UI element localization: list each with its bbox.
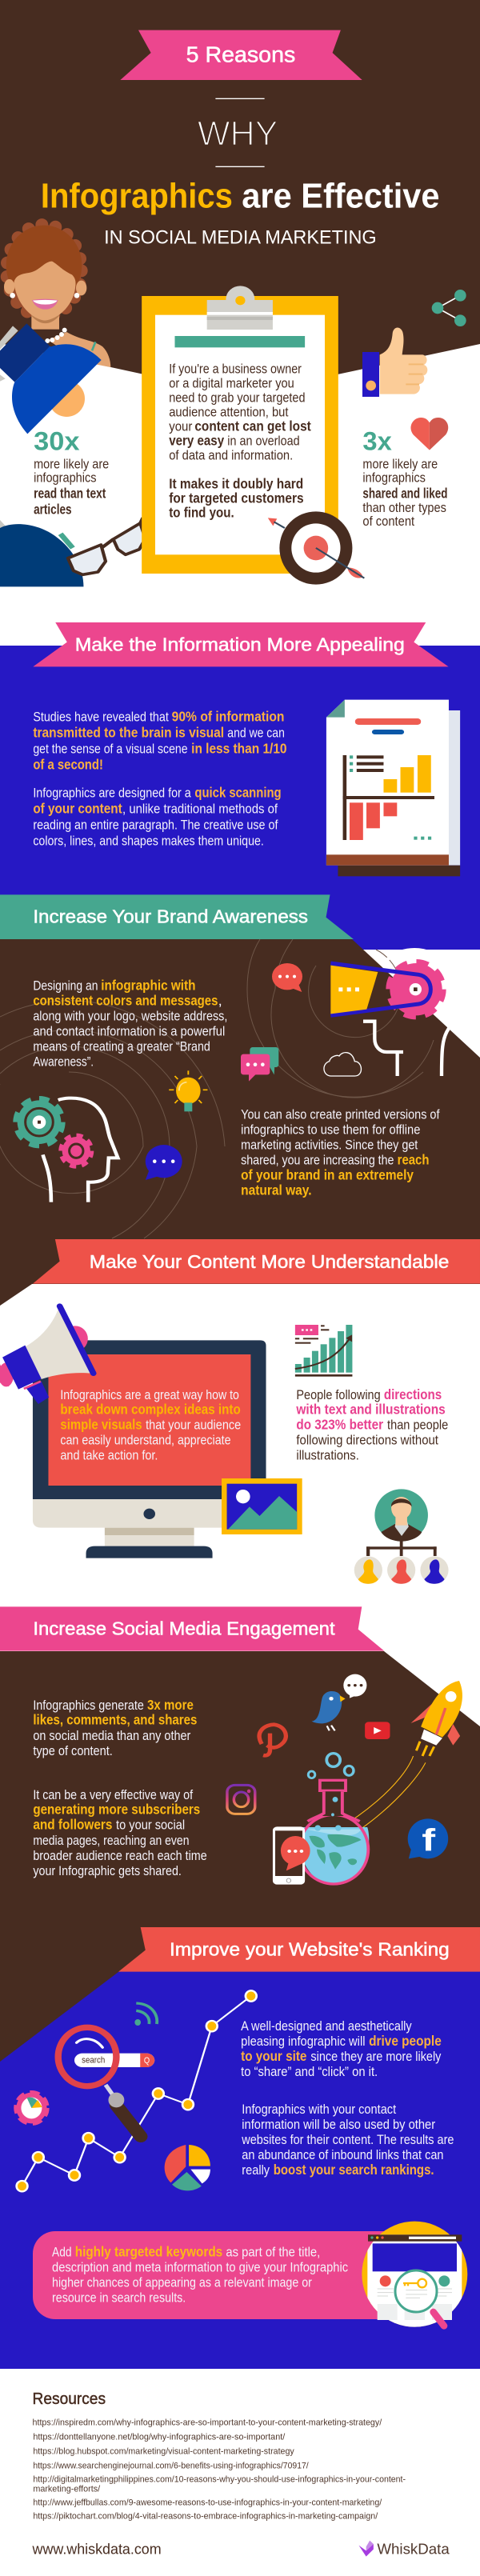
- icon: instagram: [227, 1785, 255, 1814]
- clipboard text: of data and information.: [169, 448, 293, 462]
- text block: quick scanning: [194, 785, 282, 801]
- icon: light bulb: [169, 1070, 207, 1111]
- source links: marketing-efforts/: [33, 2483, 101, 2494]
- source links: https://donttellanyone.net/blog/why-infographics-are-so-important/: [33, 2431, 286, 2442]
- ribbon heading: Make Your Content More Understandable: [90, 1252, 449, 1273]
- text block: likes, comments, and shares: [33, 1712, 197, 1728]
- ribbon heading: [0, 894, 354, 939]
- text block: designing: along with your logo, website address,: [33, 1009, 227, 1023]
- text: screen: break down complex ideas into: [60, 1402, 241, 1418]
- heading: WHY: WHY: [198, 114, 278, 153]
- panel: intro header: [0, 30, 466, 586]
- text: directions statistic: directions: [384, 1386, 442, 1403]
- text: directions statistic: following directions without: [296, 1433, 438, 1447]
- callout text: description and meta information to give your Infographic: [52, 2260, 348, 2274]
- text block: generating more subscribers: [33, 1802, 200, 1818]
- text block: Infographics are designed for a: [33, 786, 191, 800]
- text block: drive people: [369, 2033, 442, 2050]
- text: screen: Infographics are a great way how to: [60, 1387, 239, 1402]
- callout: keywords: [33, 2222, 467, 2330]
- panel: improve your website's ranking: [16, 1927, 480, 2191]
- callout text: Add: [52, 2245, 72, 2259]
- concentric rings: [0, 939, 434, 1238]
- illustration: woman with folder: [0, 225, 110, 434]
- icon: share: [432, 290, 466, 326]
- stat: 30x: [34, 427, 109, 518]
- text block: Infographics generate: [33, 1698, 144, 1713]
- text block: pleasing infographic will: [241, 2034, 366, 2049]
- icon: target and arrow: [268, 511, 364, 585]
- source links: https://piktochart.com/blog/4-vital-reasons-to-embrace-infographics-in-marketing-campaign/: [33, 2510, 378, 2521]
- source links: https://inspiredm.com/why-infographics-are-so-important-to-your-content-marketing-strategy/: [33, 2417, 382, 2427]
- text block: to your social: [116, 1818, 185, 1832]
- text: screen: [60, 1387, 241, 1462]
- text block: printed versions: [241, 1107, 440, 1198]
- text block: and we can: [227, 726, 285, 740]
- clipboard text: to find you.: [169, 505, 234, 521]
- heading: resources: Resources: [33, 2390, 106, 2408]
- text block: broader audience reach each time: [33, 1848, 207, 1863]
- ribbon: 5 Reasons: 5 Reasons: [186, 43, 295, 67]
- icon: org chart people: [354, 1489, 449, 1584]
- icon: megaphone: [0, 1306, 94, 1404]
- text block: designing: infographic with: [101, 978, 196, 994]
- ribbon heading: [33, 622, 449, 666]
- icon: youtube: [365, 1722, 390, 1739]
- text block: designing: and contact information is a powerful: [33, 1024, 225, 1038]
- illustration: bag and glasses: [0, 518, 146, 586]
- clipboard text: audience attention, but: [169, 405, 288, 419]
- ribbon heading: Make the Information More Appealing: [75, 635, 405, 655]
- icon: rocket with trails: [308, 1681, 462, 1856]
- icon: facebook bubble: [408, 1818, 448, 1858]
- callout background: [33, 2231, 409, 2319]
- text: screen: simple visuals: [60, 1417, 142, 1433]
- icon: magnifier and search bar: search: [82, 2056, 105, 2065]
- ribbon heading: Increase Your Brand Awareness: [33, 907, 308, 927]
- icon: gear with pie: [16, 2093, 47, 2123]
- clipboard text: [169, 362, 311, 521]
- stat: 30x: 30x: [34, 427, 80, 456]
- stat: 3x: infographics: [362, 470, 426, 485]
- text block: 3x more: [147, 1697, 194, 1714]
- icon: thumbs up: [362, 328, 427, 397]
- text block: [33, 709, 287, 848]
- text block: printed versions: infographics to use them for offline: [241, 1122, 420, 1137]
- panel: increase your brand awareness: [0, 894, 458, 1238]
- text: directions statistic: than people: [387, 1418, 448, 1432]
- text block: Infographics with your contact: [242, 2102, 396, 2117]
- title: Infographics: [41, 176, 233, 215]
- text block: on social media than any other: [33, 1728, 190, 1743]
- callout text: highly targeted keywords: [75, 2244, 222, 2260]
- text: directions statistic: do 323% better: [296, 1417, 383, 1433]
- text block: , unlike traditional methods of: [122, 802, 278, 816]
- text: directions statistic: [296, 1386, 448, 1462]
- clipboard panel: [142, 286, 338, 574]
- stat: 30x: read than text: [34, 486, 106, 502]
- text: directions statistic: illustrations.: [296, 1448, 359, 1462]
- text: directions statistic: People following: [296, 1387, 381, 1402]
- clipboard text: It makes it doubly hard: [169, 476, 303, 492]
- text: screen: that your audience: [146, 1418, 241, 1432]
- ribbon heading: [33, 1239, 480, 1284]
- text block: colors, lines, and shapes makes them unique.: [33, 834, 264, 848]
- text block: type of content.: [33, 1743, 113, 1758]
- text block: designing: Designing an: [33, 978, 98, 993]
- ribbon heading: [0, 1606, 384, 1651]
- clipboard text: If you're a business owner: [169, 362, 302, 376]
- panel: make the information more appealing: [33, 622, 460, 876]
- source links: https://blog.hubspot.com/marketing/visual-content-marketing-strategy: [33, 2446, 295, 2456]
- icon: report document with charts: [326, 700, 460, 876]
- illustration: monitor: [33, 1340, 266, 1558]
- title: IN SOCIAL MEDIA MARKETING: [104, 226, 377, 248]
- icon: heart: [410, 418, 448, 450]
- text block: printed versions: of your brand in an extremely: [241, 1167, 414, 1183]
- clipboard text: in an overload: [227, 434, 300, 448]
- text block: A well-designed and aesthetically: [241, 2018, 412, 2034]
- text block: designing: Awareness”.: [33, 1054, 94, 1069]
- ribbon heading: [118, 1927, 480, 1972]
- callout text: as part of the title,: [226, 2245, 320, 2259]
- icon: magnifier and search bar: [58, 2027, 154, 2137]
- stat: 30x: articles: [34, 502, 72, 518]
- source links: http://digitalmarketingphilippines.com/10-reasons-why-you-should-use-infographics-in-your-content-: [33, 2474, 406, 2484]
- source links: https://www.searchenginejournal.com/6-benefits-using-infographics/70917/: [33, 2460, 309, 2470]
- text block: designing: means of creating a greater “Brand: [33, 1039, 210, 1054]
- icon: red speech bubble: [272, 963, 302, 992]
- illustration: head with gears: [16, 1098, 118, 1202]
- icon: cloud: [324, 1053, 361, 1076]
- text block: printed versions: marketing activities. Since they get: [241, 1138, 418, 1152]
- text block: in less than 1/10: [191, 741, 287, 757]
- text block: designing: ,: [218, 993, 222, 1008]
- clipboard text: or a digital marketer you: [169, 376, 294, 390]
- stat: 3x: 3x: [362, 427, 392, 456]
- text block: really: [242, 2162, 270, 2178]
- icon: picture frame: [222, 1478, 302, 1534]
- stat: 30x: infographics: [34, 470, 97, 485]
- text block: 90% of information: [172, 709, 284, 725]
- text block: of your content: [33, 801, 122, 817]
- text block: and followers: [33, 1817, 112, 1833]
- text block: Studies have revealed that: [33, 710, 169, 724]
- callout text: [52, 2244, 348, 2305]
- text block: designing: [33, 978, 227, 1069]
- line chart: [17, 1990, 257, 2191]
- text block: your Infographic gets shared.: [33, 1863, 182, 1878]
- ribbon: 5 Reasons: [120, 30, 362, 80]
- text block: [241, 2018, 454, 2178]
- icon: phone with bubble: [273, 1826, 310, 1885]
- title: [41, 176, 439, 248]
- panel: make your content more understandable: [0, 1239, 480, 1584]
- stat: 30x: more likely are: [34, 456, 109, 471]
- text block: designing: consistent colors and messages: [33, 993, 218, 1009]
- icon: growth chart: [295, 1325, 352, 1377]
- stat: 3x: than other types: [362, 500, 446, 515]
- ribbon heading: Increase Social Media Engagement: [33, 1619, 335, 1639]
- callout text: higher chances of appearing as a relevant image or: [52, 2275, 312, 2290]
- panel: resources and footer: [32, 2390, 450, 2558]
- logo: WhiskData: [358, 2541, 450, 2558]
- icon: pinterest: [259, 1725, 286, 1755]
- ribbon heading: Improve your Website's Ranking: [170, 1940, 450, 1960]
- text block: to your site: [241, 2048, 307, 2065]
- clipboard text: your: [169, 419, 192, 434]
- text block: since they are more likely: [310, 2049, 441, 2064]
- logo: WhiskData: WhiskData: [377, 2542, 450, 2558]
- icon: wifi: [134, 2003, 157, 2026]
- website url: www.whiskdata.com: [32, 2542, 162, 2558]
- heading: WHY: [198, 98, 278, 167]
- icon: blue speech bubble: [146, 1145, 182, 1180]
- icon: twitter bird and bubble: [312, 1674, 366, 1730]
- text: screen: and take action for.: [60, 1448, 158, 1462]
- clipboard text: need to grab your targeted: [169, 390, 306, 405]
- illustration: head with gear and megaphone: [330, 950, 458, 1076]
- text block: [33, 1697, 207, 1878]
- stat: 3x: more likely are: [362, 456, 438, 471]
- icon: flask with world map: [298, 1754, 369, 1884]
- icon: browser with key magnifier: [362, 2222, 467, 2330]
- text block: transmitted to the brain is visual: [33, 725, 224, 741]
- text block: to “share” and “click” on it.: [241, 2064, 378, 2079]
- text block: printed versions: reach: [398, 1152, 429, 1168]
- icon: chat bubbles: [241, 1047, 278, 1082]
- stat: 3x: of content: [362, 514, 414, 529]
- text: screen: can easily understand, appreciate: [60, 1433, 231, 1447]
- panel: increase social media engagement: [0, 1606, 462, 1885]
- clipboard text: for targeted customers: [169, 490, 304, 506]
- text block: reading an entire paragraph. The creative use of: [33, 818, 278, 832]
- callout text: resource in search results.: [52, 2290, 186, 2305]
- clipboard text: content can get lost: [194, 418, 311, 434]
- icon: pie chart: [165, 2145, 210, 2190]
- text block: get the sense of a visual scene: [33, 742, 188, 756]
- source links: [33, 2417, 406, 2521]
- text block: printed versions: shared, you are increasing the: [241, 1153, 394, 1167]
- text block: media pages, reaching an even: [33, 1833, 189, 1848]
- icon: magnifier and search bar: Q: [144, 2057, 150, 2066]
- clipboard text: very easy: [169, 433, 224, 449]
- source links: http://www.jeffbullas.com/9-awesome-reasons-to-use-infographics-in-your-content-marketing/: [33, 2497, 382, 2507]
- icon: facebook bubble: f: [422, 1822, 436, 1858]
- text block: printed versions: natural way.: [241, 1182, 312, 1198]
- title: are Effective: [242, 176, 439, 215]
- text block: of a second!: [33, 757, 103, 773]
- stat: 3x: [362, 427, 447, 529]
- text block: It can be a very effective way of: [33, 1787, 194, 1802]
